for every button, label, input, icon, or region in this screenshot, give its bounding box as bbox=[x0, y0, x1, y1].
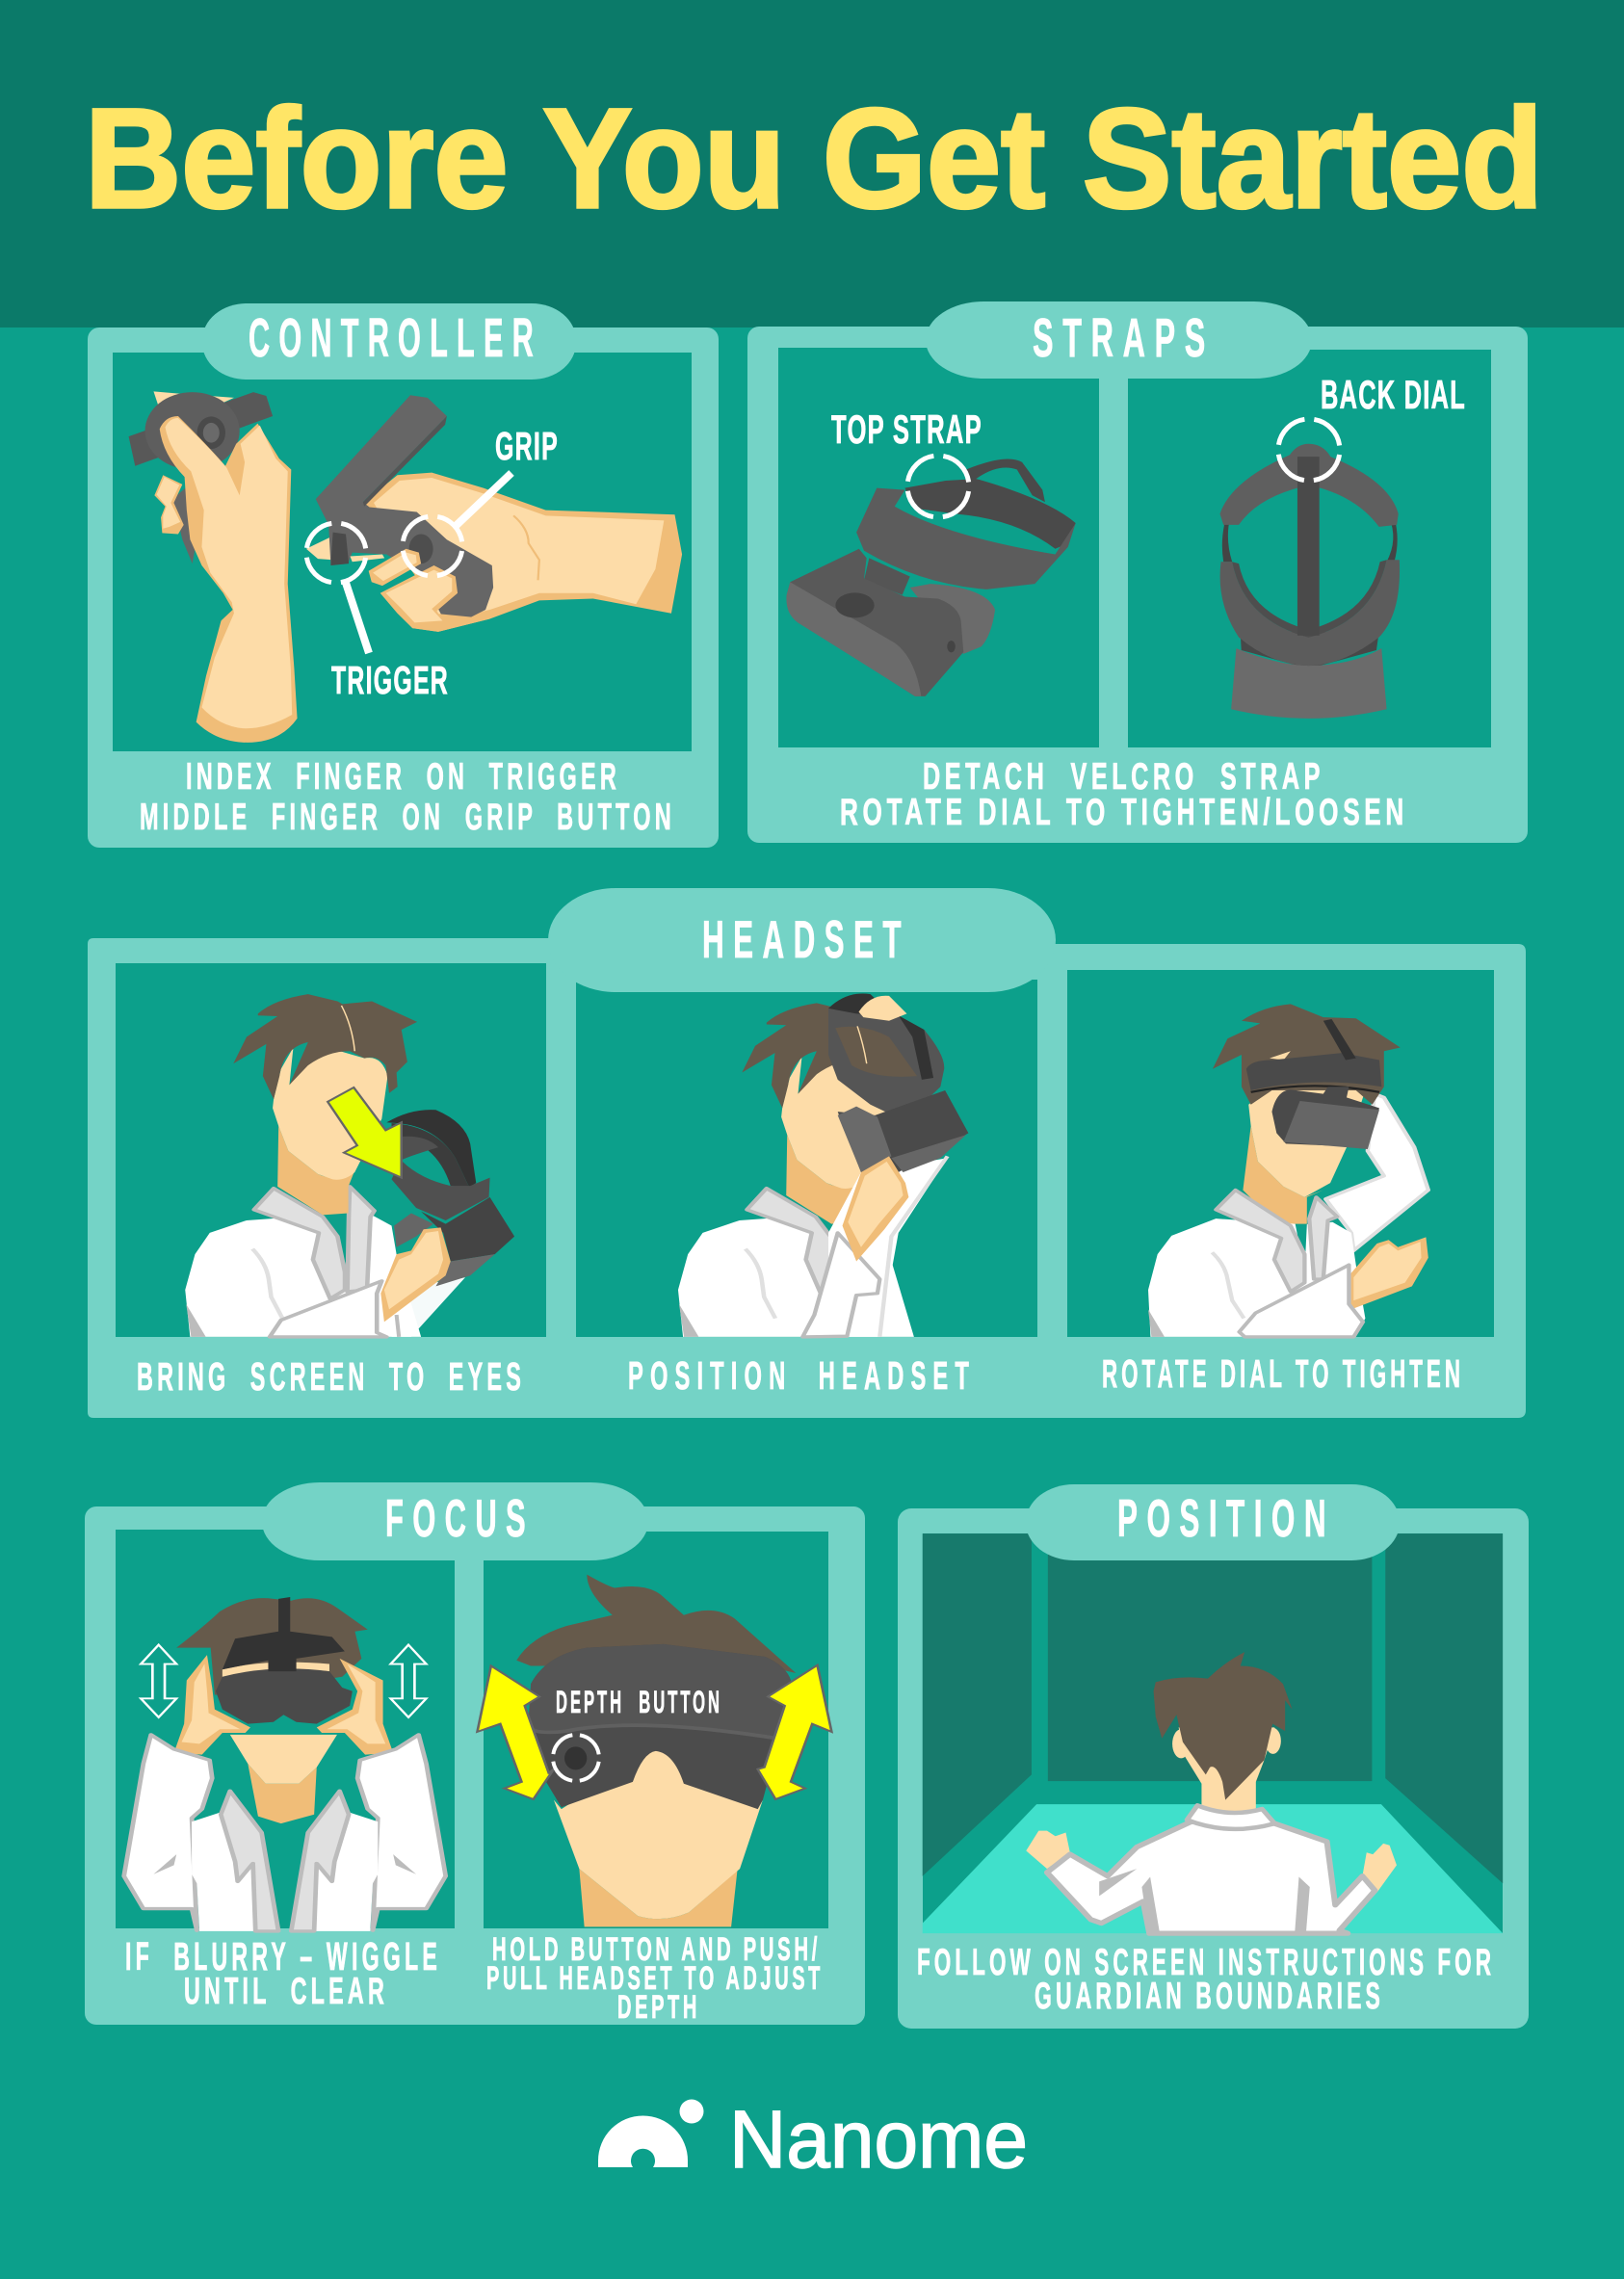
grip marker bbox=[403, 516, 462, 576]
focus tab bbox=[262, 1482, 648, 1560]
caption: bring screen to eyes: BRING SCREEN TO EYES bbox=[137, 1354, 525, 1399]
room floor bbox=[923, 1804, 1503, 1933]
panel: headset bbox=[88, 888, 1526, 1418]
controller caption: MIDDLE FINGER ON GRIP BUTTON bbox=[140, 797, 675, 838]
focus right caption: PULL HEADSET TO ADJUST bbox=[486, 1960, 824, 1997]
top strap marker bbox=[907, 456, 969, 517]
icon: headset rear view bbox=[1219, 444, 1400, 719]
straps right window bbox=[1128, 350, 1491, 747]
trigger leader line bbox=[345, 580, 369, 653]
illustration: person adjusting headset bbox=[124, 1597, 446, 1931]
illustration: depth button close-up bbox=[478, 1575, 831, 1926]
headset heading: HEADSET bbox=[702, 909, 910, 969]
straps caption bbox=[840, 756, 1408, 833]
top strap label: TOP STRAP bbox=[831, 406, 982, 452]
focus right window bbox=[484, 1532, 828, 1928]
focus right caption: DEPTH bbox=[617, 1989, 700, 2026]
logo mark bbox=[598, 2100, 703, 2167]
controller caption: INDEX FINGER ON TRIGGER bbox=[186, 756, 620, 798]
focus right caption: HOLD BUTTON AND PUSH/ bbox=[492, 1931, 821, 1968]
position caption bbox=[917, 1942, 1495, 2017]
depth button label: DEPTH BUTTON bbox=[556, 1685, 722, 1719]
focus frame bbox=[85, 1506, 865, 2025]
panel: position bbox=[898, 1484, 1529, 2029]
position frame bbox=[898, 1508, 1529, 2029]
controller caption bbox=[140, 756, 675, 838]
headset frame bbox=[88, 938, 1526, 1418]
icon: left double arrow bbox=[141, 1645, 176, 1717]
person from behind bbox=[1026, 1652, 1397, 1933]
controller window bbox=[113, 353, 692, 751]
arrow: towards eyes bbox=[327, 1087, 402, 1178]
grip leader line bbox=[455, 473, 511, 527]
arrow: right push/pull bbox=[758, 1665, 831, 1799]
logo wordmark: Nanome bbox=[729, 2094, 1028, 2185]
depth button marker bbox=[553, 1735, 599, 1781]
icon: right double arrow bbox=[391, 1645, 427, 1717]
icon: hand holding controller upright bbox=[129, 391, 298, 743]
straps left window bbox=[778, 348, 1099, 747]
icon: headset with top strap bbox=[786, 458, 1076, 696]
controller heading: CONTROLLER bbox=[249, 307, 542, 369]
focus left caption: IF BLURRY – WIGGLE bbox=[125, 1934, 441, 1978]
headset tab bbox=[548, 888, 1056, 992]
arrow: left push/pull bbox=[478, 1665, 554, 1799]
straps tab bbox=[926, 301, 1312, 379]
panel: straps bbox=[747, 301, 1528, 843]
illustration: bring screen to eyes bbox=[185, 994, 514, 1337]
headset window 1 bbox=[116, 963, 546, 1337]
straps frame bbox=[747, 327, 1528, 843]
focus right caption bbox=[486, 1931, 824, 2026]
controller frame bbox=[88, 327, 719, 848]
focus left window bbox=[116, 1530, 455, 1928]
position caption: GUARDIAN BOUNDARIES bbox=[1035, 1976, 1384, 2017]
focus heading: FOCUS bbox=[385, 1488, 535, 1548]
position heading: POSITION bbox=[1117, 1488, 1335, 1548]
room left wall bbox=[923, 1533, 1032, 1876]
controller tab bbox=[202, 303, 576, 380]
position tab bbox=[1026, 1484, 1400, 1560]
position window bbox=[923, 1533, 1503, 1933]
illustration: guardian room bbox=[923, 1533, 1503, 1933]
room right wall bbox=[1385, 1533, 1503, 1883]
straps caption: DETACH VELCRO STRAP bbox=[923, 756, 1324, 798]
panel: focus bbox=[85, 1482, 865, 2026]
icon: hand gripping controller sideways bbox=[306, 395, 682, 632]
headset window 2 bbox=[576, 980, 1037, 1337]
illustration: rotate dial to tighten bbox=[1148, 1004, 1428, 1337]
icon: depth button bbox=[564, 1746, 587, 1769]
title: Before You Get Started bbox=[85, 80, 1543, 238]
back dial label: BACK DIAL bbox=[1321, 372, 1466, 417]
panel: controller bbox=[88, 303, 719, 848]
back dial marker bbox=[1278, 419, 1340, 481]
headset window 3 bbox=[1067, 970, 1494, 1337]
trigger label: TRIGGER bbox=[331, 658, 449, 702]
logo: Nanome bbox=[598, 2094, 1028, 2185]
focus left caption: UNTIL CLEAR bbox=[184, 1971, 388, 2012]
caption: position headset: POSITION HEADSET bbox=[628, 1353, 976, 1398]
focus left caption bbox=[125, 1934, 441, 2012]
illustration: position headset bbox=[678, 993, 968, 1337]
room back wall bbox=[1048, 1546, 1372, 1781]
header band bbox=[0, 0, 1624, 327]
trigger marker bbox=[306, 523, 366, 583]
straps heading: STRAPS bbox=[1033, 307, 1215, 369]
grip label: GRIP bbox=[495, 424, 559, 468]
